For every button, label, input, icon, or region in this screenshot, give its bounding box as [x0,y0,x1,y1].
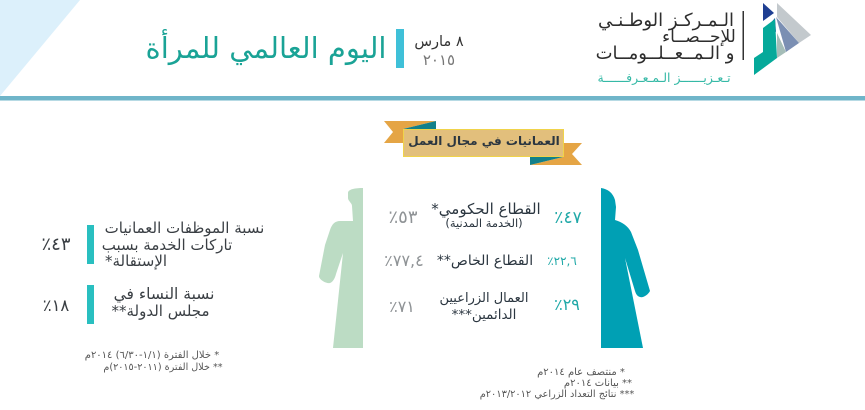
row: government sector: ٥٣٪ [388,207,418,228]
stat: resignations: الإستقالة* [105,252,167,270]
row: government sector: (الخدمة المدنية) [445,216,523,230]
row: government sector: ٤٧٪ [554,208,582,228]
logo name [596,10,736,64]
row: agricultural workers: ٧١٪ [389,297,415,316]
logo name: الـمـركـز الوطـنـي [598,10,734,31]
logo: national centre [596,3,811,86]
date: ٨ مارس [414,34,464,50]
footnotes: left [85,350,223,373]
ribbon heading: العمانيات في مجال العمل [408,134,560,148]
footnotes: left: ** خلال الفترة (٢٠١١-٢٠١٥)م [103,362,223,373]
row: government sector: القطاع الحكومي* [431,200,541,219]
logo tagline: تـعـزيــــــز الـمـعـرفــــــة [597,70,731,86]
stat: resignations: تاركات الخدمة بسبب [102,236,232,254]
stat: state council: ١٨٪ [43,296,69,315]
footnotes: right: ** بيانات ٢٠١٤م [564,378,632,389]
logo divider [742,11,744,60]
row: private sector: ٧٧,٤٪ [384,251,424,270]
footnotes: right: *** نتائج التعداد الزراعي ٢٠١٣/٢٠١٢م [480,389,634,400]
logo mark [754,3,811,75]
row: agricultural workers: ٢٩٪ [554,295,580,314]
date: ٢٠١٥ [423,51,455,69]
header corner triangle [0,0,80,96]
title: اليوم العالمي للمرأة [146,28,386,66]
row: private sector [384,251,577,270]
ribbon heading [384,121,582,165]
footnotes: right [480,367,634,400]
row: government sector [388,200,582,230]
stat: resignations: ٤٣٪ [41,234,71,255]
row: agricultural workers [389,291,580,323]
header rule [0,96,865,100]
row: private sector: ٢٢,٦٪ [547,254,577,268]
stat: resignations: نسبة الموظفات العمانيات [105,219,264,237]
date [414,34,464,69]
row: agricultural workers: العمال الزراعيين [439,291,529,306]
stat: resignations [41,219,264,270]
figure: woman [601,188,650,348]
stat: state council: مجلس الدولة** [111,302,210,320]
footnotes: right: * منتصف عام ٢٠١٤م [537,367,625,378]
stat: state council [43,285,214,324]
stat: state council: نسبة النساء في [114,285,214,304]
footnotes: left: * خلال الفترة (١/١-٦/٣٠) ٢٠١٤م [85,350,219,361]
row: agricultural workers: الدائمين*** [452,307,516,323]
logo name: للإحــصــاء [662,27,736,47]
figure: man [319,188,363,348]
logo name: و الـمــعــلــومــات [596,43,734,64]
title divider [396,29,404,68]
row: private sector: القطاع الخاص** [437,253,533,269]
